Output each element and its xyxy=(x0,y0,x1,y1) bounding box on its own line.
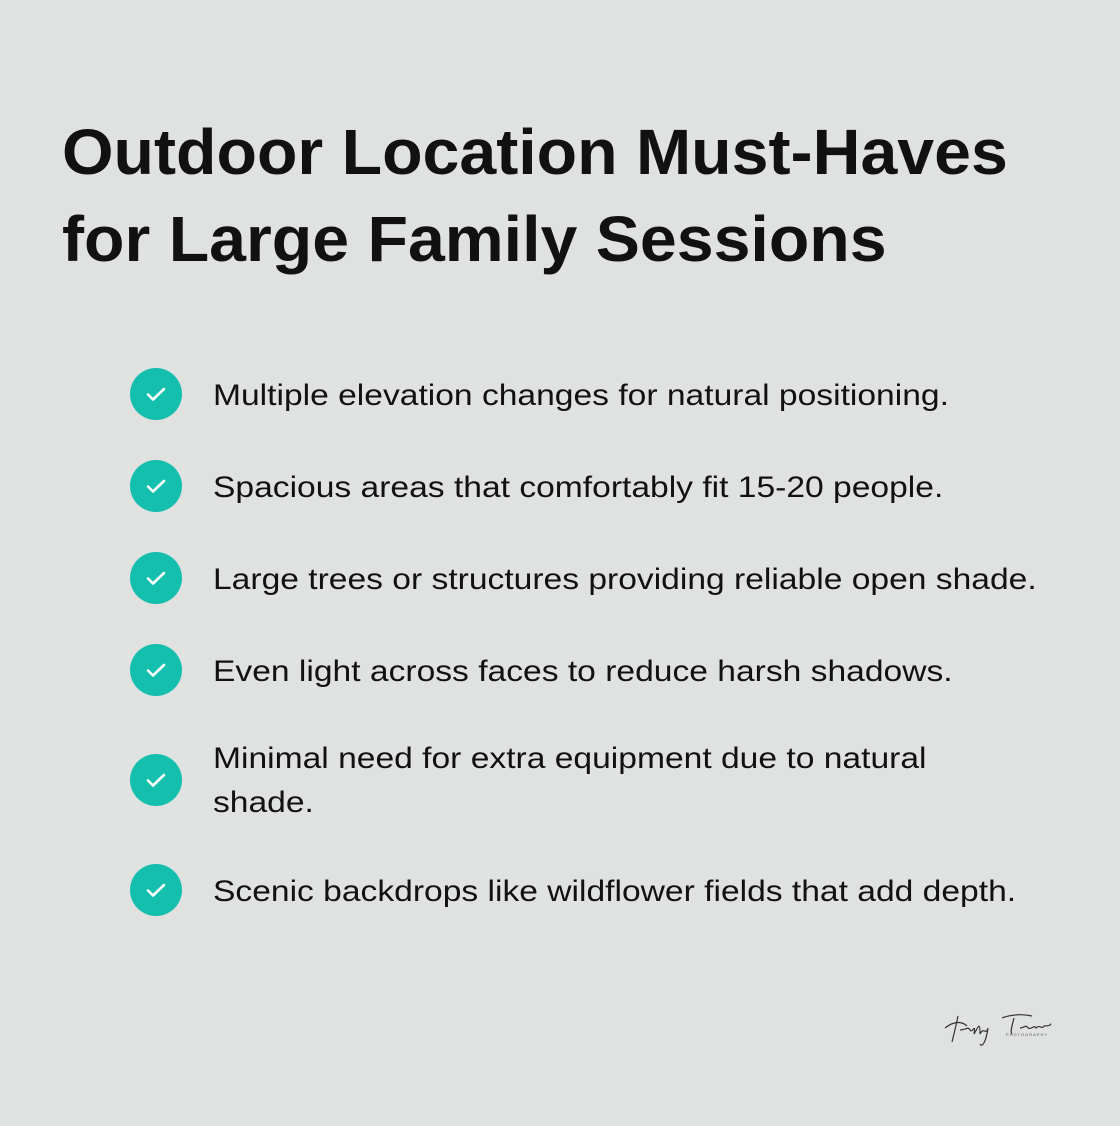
item 1: Multiple elevation changes for natural positioning. xyxy=(213,379,949,412)
logo signature: PHOTOGRAPHY xyxy=(1006,1032,1048,1037)
item 5: Minimal need for extra equipment due to natural xyxy=(213,742,926,775)
title xyxy=(62,116,1008,275)
title: for Large Family Sessions xyxy=(62,203,887,275)
item 5 xyxy=(130,742,926,819)
item 3: Large trees or structures providing reliable open shade. xyxy=(213,563,1037,596)
item 2: Spacious areas that comfortably fit 15-20 people. xyxy=(213,471,943,504)
item 6: Scenic backdrops like wildflower fields that add depth. xyxy=(213,875,1016,908)
item 2 xyxy=(130,460,943,512)
title: Outdoor Location Must-Haves xyxy=(62,116,1008,188)
item 1 xyxy=(130,368,949,420)
item 5: shade. xyxy=(213,786,314,819)
logo signature xyxy=(944,1014,1052,1046)
item 4 xyxy=(130,644,953,696)
item 3 xyxy=(130,552,1037,604)
item 4: Even light across faces to reduce harsh shadows. xyxy=(213,655,953,688)
item 6 xyxy=(130,864,1016,916)
